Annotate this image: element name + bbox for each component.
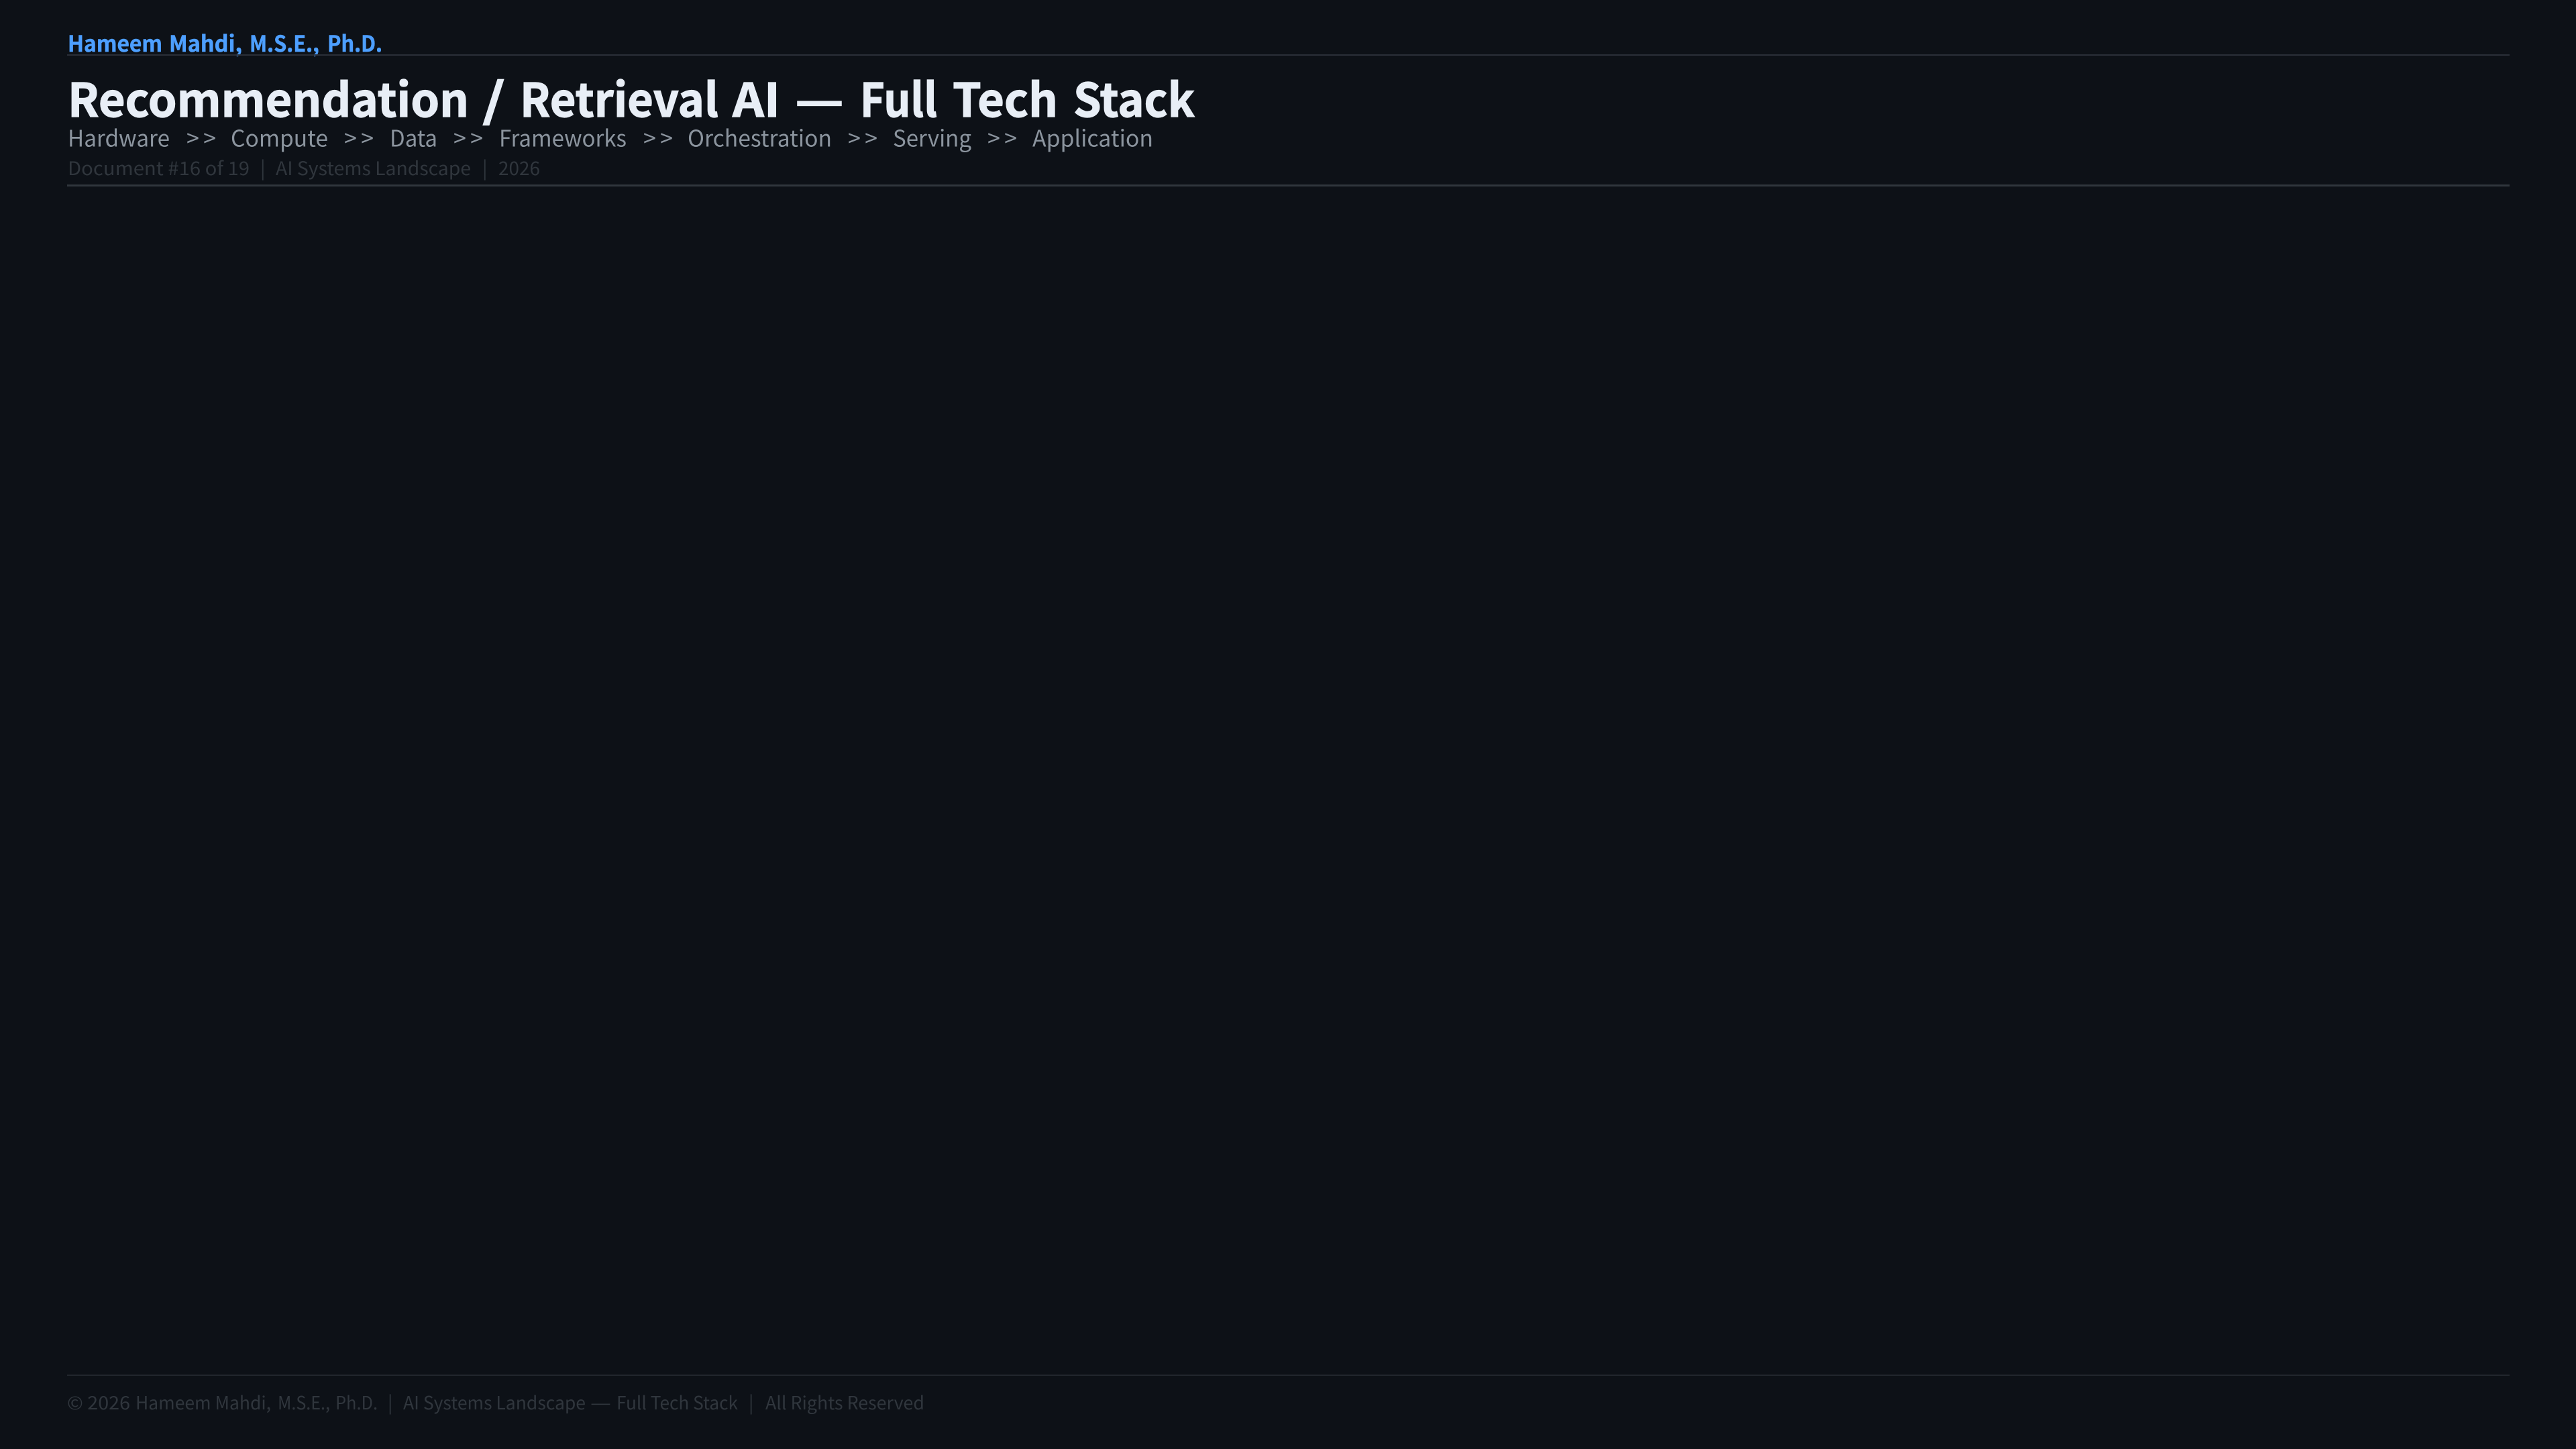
footer copyright: M.S.E.,	[278, 1389, 330, 1415]
author name: M.S.E.,	[250, 26, 319, 58]
stack layers subtitle: >>	[643, 121, 673, 153]
stack layers subtitle: >>	[453, 121, 483, 153]
document info: |	[260, 154, 266, 181]
title: Stack	[1073, 63, 1195, 130]
title	[68, 63, 1195, 130]
title: Recommendation	[68, 63, 469, 130]
title: Full	[860, 63, 937, 130]
document info: |	[482, 154, 488, 181]
footer copyright	[67, 1389, 924, 1415]
author name: Hameem	[68, 26, 162, 58]
stack layers subtitle: Orchestration	[688, 121, 832, 153]
stack layers subtitle: Serving	[893, 121, 971, 153]
stack layers subtitle: Frameworks	[499, 121, 627, 153]
document info	[68, 154, 540, 181]
document info: AI Systems Landscape	[276, 154, 471, 181]
stack layers subtitle	[68, 121, 1153, 153]
footer copyright: AI Systems Landscape	[403, 1389, 586, 1415]
title: Tech	[953, 63, 1058, 130]
stack layers subtitle: >>	[186, 121, 216, 153]
stack layers subtitle: Application	[1032, 121, 1153, 153]
stack layers subtitle: >>	[987, 121, 1017, 153]
title: —	[795, 63, 844, 130]
footer copyright: All Rights Reserved	[765, 1389, 924, 1415]
footer copyright: Ph.D.	[335, 1389, 378, 1415]
stack layers subtitle: Compute	[231, 121, 328, 153]
footer copyright: —	[590, 1389, 611, 1415]
footer copyright: © 2026	[67, 1389, 130, 1415]
document info: Document #16 of 19	[68, 154, 250, 181]
stack layers subtitle: >>	[848, 121, 877, 153]
footer copyright: Hameem Mahdi,	[136, 1389, 271, 1415]
stack layers subtitle: Data	[390, 121, 437, 153]
title: AI	[732, 63, 780, 130]
footer copyright: |	[388, 1389, 392, 1415]
document info: 2026	[498, 154, 540, 181]
stack layers subtitle: Hardware	[68, 121, 170, 153]
author name: Ph.D.	[327, 26, 382, 58]
footer copyright: Full Tech Stack	[616, 1389, 738, 1415]
author name: Mahdi,	[169, 26, 242, 58]
title: /	[482, 63, 505, 130]
footer copyright: |	[749, 1389, 753, 1415]
title: Retrieval	[520, 63, 718, 130]
author name	[68, 26, 382, 58]
stack layers subtitle: >>	[344, 121, 374, 153]
